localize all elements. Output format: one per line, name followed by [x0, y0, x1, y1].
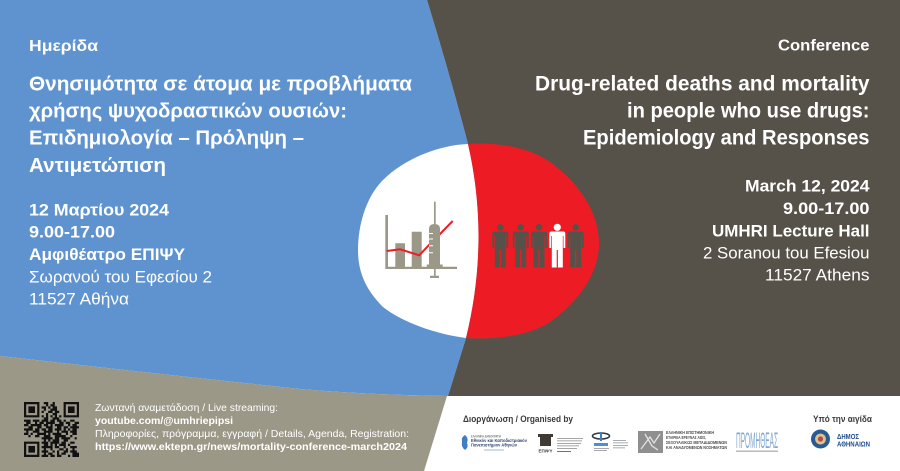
text block: streaming and registration links [95, 402, 409, 453]
heading: English title: Drug-related deaths and mortality [535, 73, 870, 96]
logo: Prometheas [736, 428, 778, 453]
heading: Greek title: Επιδημιολογία – Πρόληψη – [29, 128, 304, 150]
heading: English title: Epidemiology and Responses [583, 126, 870, 149]
logo: Municipality of Athens: ΑΘΗΝΑΙΩΝ [837, 442, 870, 448]
text block: Greek date and place [29, 201, 212, 308]
English text block [535, 38, 870, 285]
person 4 highlighted white [549, 224, 565, 268]
text block: Greek date and place: Αμφιθέατρο ΕΠΙΨΥ [29, 245, 186, 264]
text block: English date and place [703, 177, 870, 285]
icon: row of people, one highlighted [492, 224, 584, 268]
logo: Hellenic scientific society: ΣΕΞΟΥΑΛΙΚΩΣ ΜΕΤΑΔΙΔΟΜΕΝΩΝ [666, 440, 727, 445]
icon: chart with syringe [385, 202, 457, 278]
heading: English title: in people who use drugs: [627, 100, 870, 123]
heading: Greek title [29, 74, 413, 177]
person 1 [492, 224, 508, 268]
logo: Municipality of Athens: ΔΗΜΟΣ [837, 434, 859, 441]
logo: EPIPSY column: ΕΠΙΨΥ [538, 448, 552, 454]
label: Conference: Conference [778, 38, 870, 55]
heading: Greek title: Αντιμετώπιση [29, 155, 166, 177]
panel: dark English background [427, 0, 900, 396]
heading: Greek title: χρήσης ψυχοδραστικών ουσιών: [29, 100, 347, 122]
text block: streaming and registration links: https://www.ektepn.gr/news/mortality-conference-march2024 [95, 441, 407, 453]
text block: Greek date and place: 9.00-17.00 [29, 223, 115, 242]
heading: Greek title: Θνησιμότητα σε άτομα με προβλήματα [29, 74, 413, 96]
syringe [427, 202, 443, 278]
panel: grey footer wedge [0, 356, 447, 471]
central white half-shape [358, 144, 479, 338]
person 5 [568, 224, 584, 268]
logo: Municipality of Athens [811, 430, 870, 448]
logo: University of Athens: Εθνικόν και Καποδιστριακόν [471, 438, 527, 443]
heading: organisers: Διοργάνωση / Organised by [463, 414, 574, 425]
central red half-shape [466, 144, 599, 338]
logo: EPIPSY column [538, 434, 583, 454]
heading: under the auspices: Υπό την αιγίδα [813, 414, 872, 425]
logo: University of Athens [462, 434, 527, 450]
text block: English date and place: March 12, 2024 [745, 177, 870, 196]
text block: Greek date and place: Σωρανού του Εφεσίου 2 [29, 268, 212, 287]
label: Ημερίδα: Ημερίδα [29, 38, 99, 55]
text block: streaming and registration links: Ζωντανή αναμετάδοση / Live streaming: [95, 402, 278, 414]
Greek text block [29, 38, 413, 308]
text block: Greek date and place: 11527 Αθήνα [29, 290, 129, 308]
heading: English title [535, 73, 870, 149]
text block: Greek date and place: 12 Μαρτίου 2024 [29, 201, 170, 220]
text block: English date and place: 9.00-17.00 [783, 199, 870, 218]
logo: Hellenic scientific society: ΚΑΙ ΑΝΑΔΥΟΜΕΝΩΝ ΝΟΣΗΜΑΤΩΝ [666, 445, 727, 450]
panel: blue Greek background [0, 0, 479, 396]
logo: University of Athens: Πανεπιστήμιον Αθηνών [471, 442, 517, 448]
chart bars [395, 232, 422, 267]
red trend line [387, 221, 453, 255]
text block: English date and place: 2 Soranou tou Efesiou [703, 244, 870, 262]
logo: Hellenic scientific society: ΕΛΛΗΝΙΚΗ ΕΠΙΣΤΗΜΟΝΙΚΗ [666, 430, 714, 435]
text block: streaming and registration links: Πληροφορίες, πρόγραμμα, εγγραφή / Details, Agenda, Registration: [95, 428, 409, 440]
text block: English date and place: 11527 Athens [765, 266, 870, 285]
logo: Hellenic scientific society [638, 430, 727, 453]
text block: English date and place: UMHRI Lecture Hall [712, 222, 870, 241]
person 3 [531, 224, 547, 268]
chart axes [385, 215, 457, 269]
logo: Hellenic scientific society: ΕΤΑΙΡΕΙΑ ΕΡΕΥΝΑΣ AIDS, [666, 435, 706, 440]
person 2 [513, 224, 529, 268]
infographic canvas: ΠΡΟΜΗΘΕΑΣ [736, 428, 778, 453]
QR code [24, 403, 79, 456]
logo: third organiser [592, 432, 628, 451]
text block: streaming and registration links: youtube.com/@umhriepipsi [95, 415, 233, 427]
logo: University of Athens: ΕΛΛΗΝΙΚΗ ΔΗΜΟΚΡΑΤΙΑ [471, 434, 502, 438]
